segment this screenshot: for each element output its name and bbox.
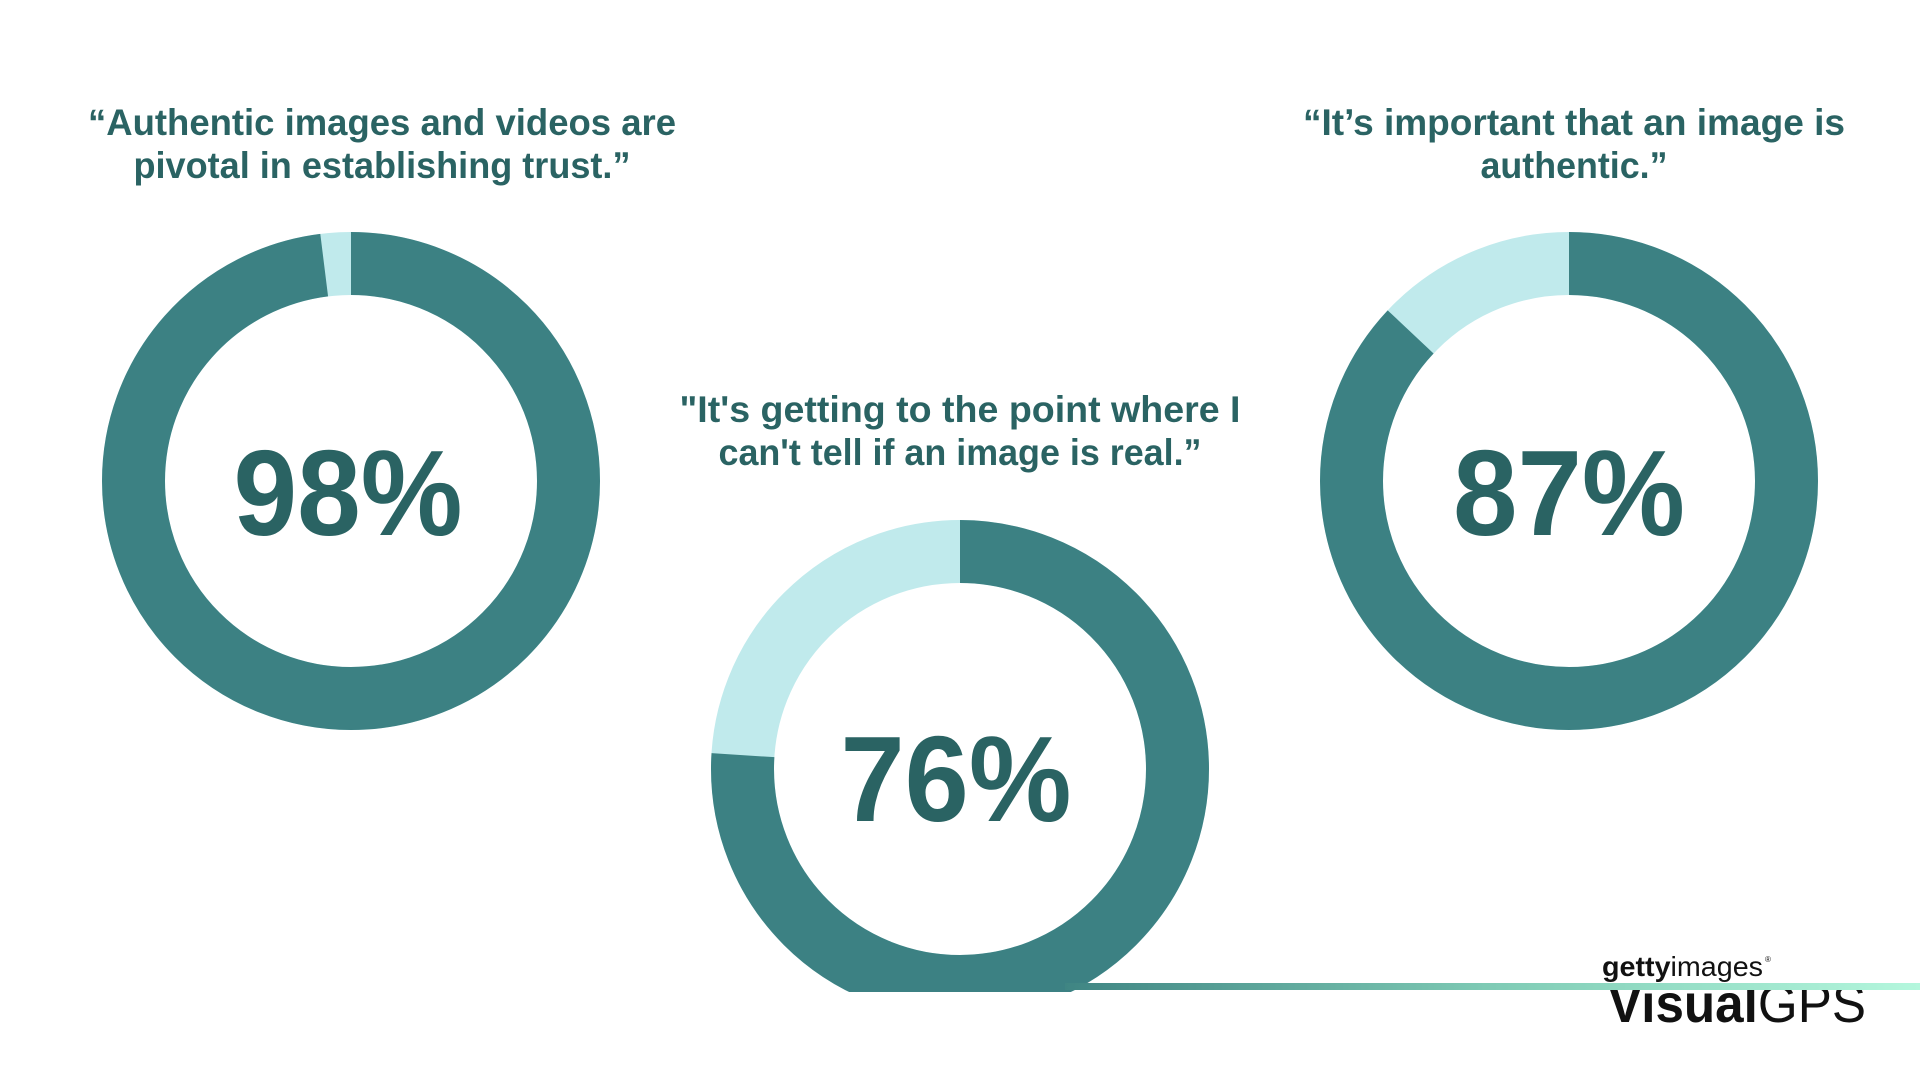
heading: authentic trust: pivotal in establishing trust.” xyxy=(134,145,630,186)
heading: authentic trust xyxy=(88,102,676,186)
heading: important authentic: authentic.” xyxy=(1480,145,1668,186)
heading: can't tell: can't tell if an image is real.” xyxy=(718,432,1202,473)
donut chart: 87% xyxy=(1352,264,1786,698)
heading: important authentic xyxy=(1303,102,1845,186)
heading: important authentic: “It’s important that an image is xyxy=(1303,102,1845,143)
heading: can't tell xyxy=(680,389,1240,473)
logo: getty images visual GPS: VisualGPS xyxy=(1608,974,1866,1034)
heading: authentic trust: “Authentic images and videos are xyxy=(88,102,676,143)
donut chart: 76% xyxy=(742,552,1178,986)
number: 76%: 76% xyxy=(840,711,1072,847)
donut chart: 98% xyxy=(134,264,568,698)
number: 87%: 87% xyxy=(1453,425,1685,561)
heading: can't tell: "It's getting to the point where I xyxy=(680,389,1240,430)
logo: getty images visual GPS: gettyimages xyxy=(1602,951,1763,982)
panel: can't tell xyxy=(680,389,1240,986)
decorative gradient line xyxy=(1065,983,1920,990)
number: 98%: 98% xyxy=(234,425,462,561)
logo: getty images visual GPS: ® xyxy=(1765,955,1771,964)
logo: getty images visual GPS xyxy=(1602,951,1866,1034)
panel: important authentic xyxy=(1303,102,1845,698)
panel: authentic trust xyxy=(88,102,676,698)
